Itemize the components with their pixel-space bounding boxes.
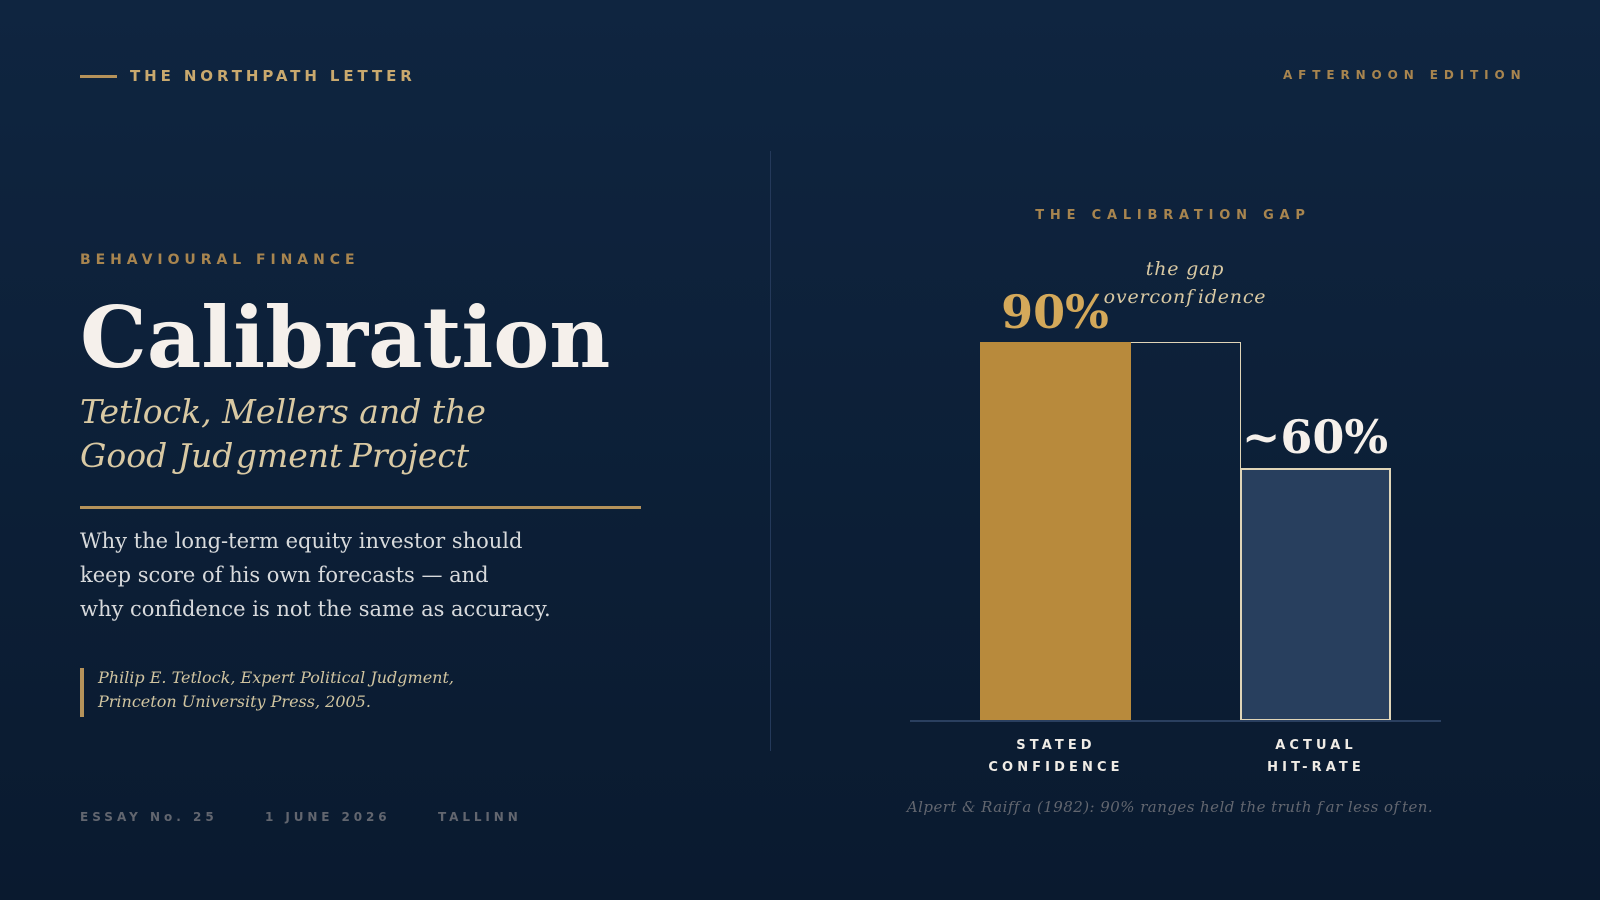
stated confidence label: STATED bbox=[1016, 738, 1096, 753]
eyebrow: BEHAVIOURAL FINANCE bbox=[80, 252, 360, 268]
baseline bbox=[910, 720, 1441, 722]
stated confidence bar bbox=[980, 342, 1131, 721]
gold rule bbox=[80, 506, 641, 509]
edition label: AFTERNOON EDITION bbox=[1283, 68, 1527, 82]
stated confidence label bbox=[988, 738, 1124, 775]
stated confidence value: 90% bbox=[1001, 285, 1109, 339]
masthead rule bbox=[80, 75, 117, 78]
actual hit-rate label: ACTUAL bbox=[1275, 738, 1357, 753]
masthead title: THE NORTHPATH LETTER bbox=[130, 67, 416, 85]
vertical divider bbox=[770, 151, 771, 751]
footer: essay number: ESSAY No. 25 bbox=[80, 810, 218, 824]
citation bar bbox=[80, 668, 84, 717]
summary text bbox=[80, 529, 551, 621]
subtitle: Good Judgment Project bbox=[80, 436, 469, 475]
source note: Alpert & Raiffa (1982): 90% ranges held the truth far less often. bbox=[907, 798, 1433, 816]
actual hit-rate label bbox=[1267, 738, 1365, 775]
summary text: why confidence is not the same as accuracy. bbox=[80, 597, 551, 621]
gap bracket bbox=[1130, 342, 1241, 721]
footer: place: TALLINN bbox=[438, 810, 522, 824]
citation text: Princeton University Press, 2005. bbox=[98, 692, 371, 711]
chart title: THE CALIBRATION GAP bbox=[1035, 208, 1311, 223]
footer: date: 1 JUNE 2026 bbox=[265, 810, 390, 824]
subtitle bbox=[80, 392, 486, 475]
actual hit-rate label: HIT-RATE bbox=[1267, 760, 1365, 775]
stated confidence label: CONFIDENCE bbox=[988, 760, 1124, 775]
actual hit-rate value: ~60% bbox=[1242, 410, 1388, 464]
gap label: the gap bbox=[1146, 258, 1224, 280]
citation text: Philip E. Tetlock, Expert Political Judgment, bbox=[98, 668, 454, 687]
citation bbox=[80, 668, 454, 717]
summary text: keep score of his own forecasts — and bbox=[80, 563, 489, 587]
chart panel bbox=[906, 208, 1441, 816]
citation text bbox=[98, 668, 454, 711]
summary text: Why the long-term equity investor should bbox=[80, 529, 522, 553]
subtitle: Tetlock, Mellers and the bbox=[80, 392, 486, 431]
actual hit-rate bar bbox=[1240, 468, 1391, 721]
gap label: overconfidence bbox=[1104, 286, 1266, 308]
title: Calibration bbox=[80, 288, 610, 387]
gap label bbox=[1104, 258, 1266, 308]
